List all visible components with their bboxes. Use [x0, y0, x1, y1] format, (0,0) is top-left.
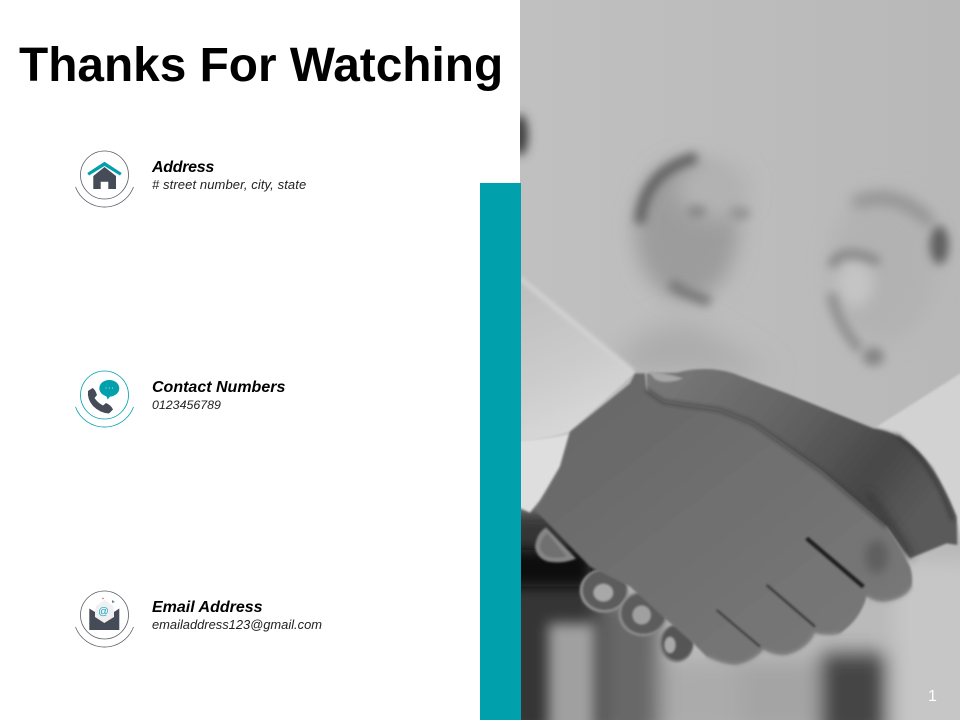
contact: phone: [75, 370, 285, 428]
title: Thanks For Watching: [19, 39, 503, 92]
phone value: 0123456789: [152, 398, 221, 412]
address value: # street number, city, state: [152, 177, 306, 192]
teal vertical bar: [480, 183, 521, 720]
contact: address: [75, 150, 306, 208]
page number: 1: [928, 688, 937, 705]
icon: open envelope: @: [98, 606, 109, 618]
main hand: [535, 373, 912, 665]
left lower cuff: [517, 434, 569, 513]
contact: email: [75, 590, 322, 648]
email value: emailaddress123@gmail.com: [152, 617, 322, 632]
hand shading: [647, 372, 912, 665]
finger three: [660, 624, 694, 662]
lower finger: [535, 527, 576, 562]
icon: open envelope: [75, 590, 134, 648]
thumb side hand: [647, 369, 957, 558]
background below the hands: [500, 507, 960, 720]
photo: handshake in greyscale: [520, 0, 960, 720]
address heading: Address: [152, 159, 214, 176]
finger one: [580, 569, 628, 613]
icon: house: [75, 150, 134, 208]
email heading: Email Address: [152, 599, 263, 616]
phone heading: Contact Numbers: [152, 379, 285, 396]
right cuff: [877, 372, 960, 550]
finger two: [618, 592, 667, 636]
blurred background people: [512, 114, 949, 373]
icon: phone with speech bubble: [75, 370, 134, 428]
sleeve: left person upper: [520, 277, 635, 441]
